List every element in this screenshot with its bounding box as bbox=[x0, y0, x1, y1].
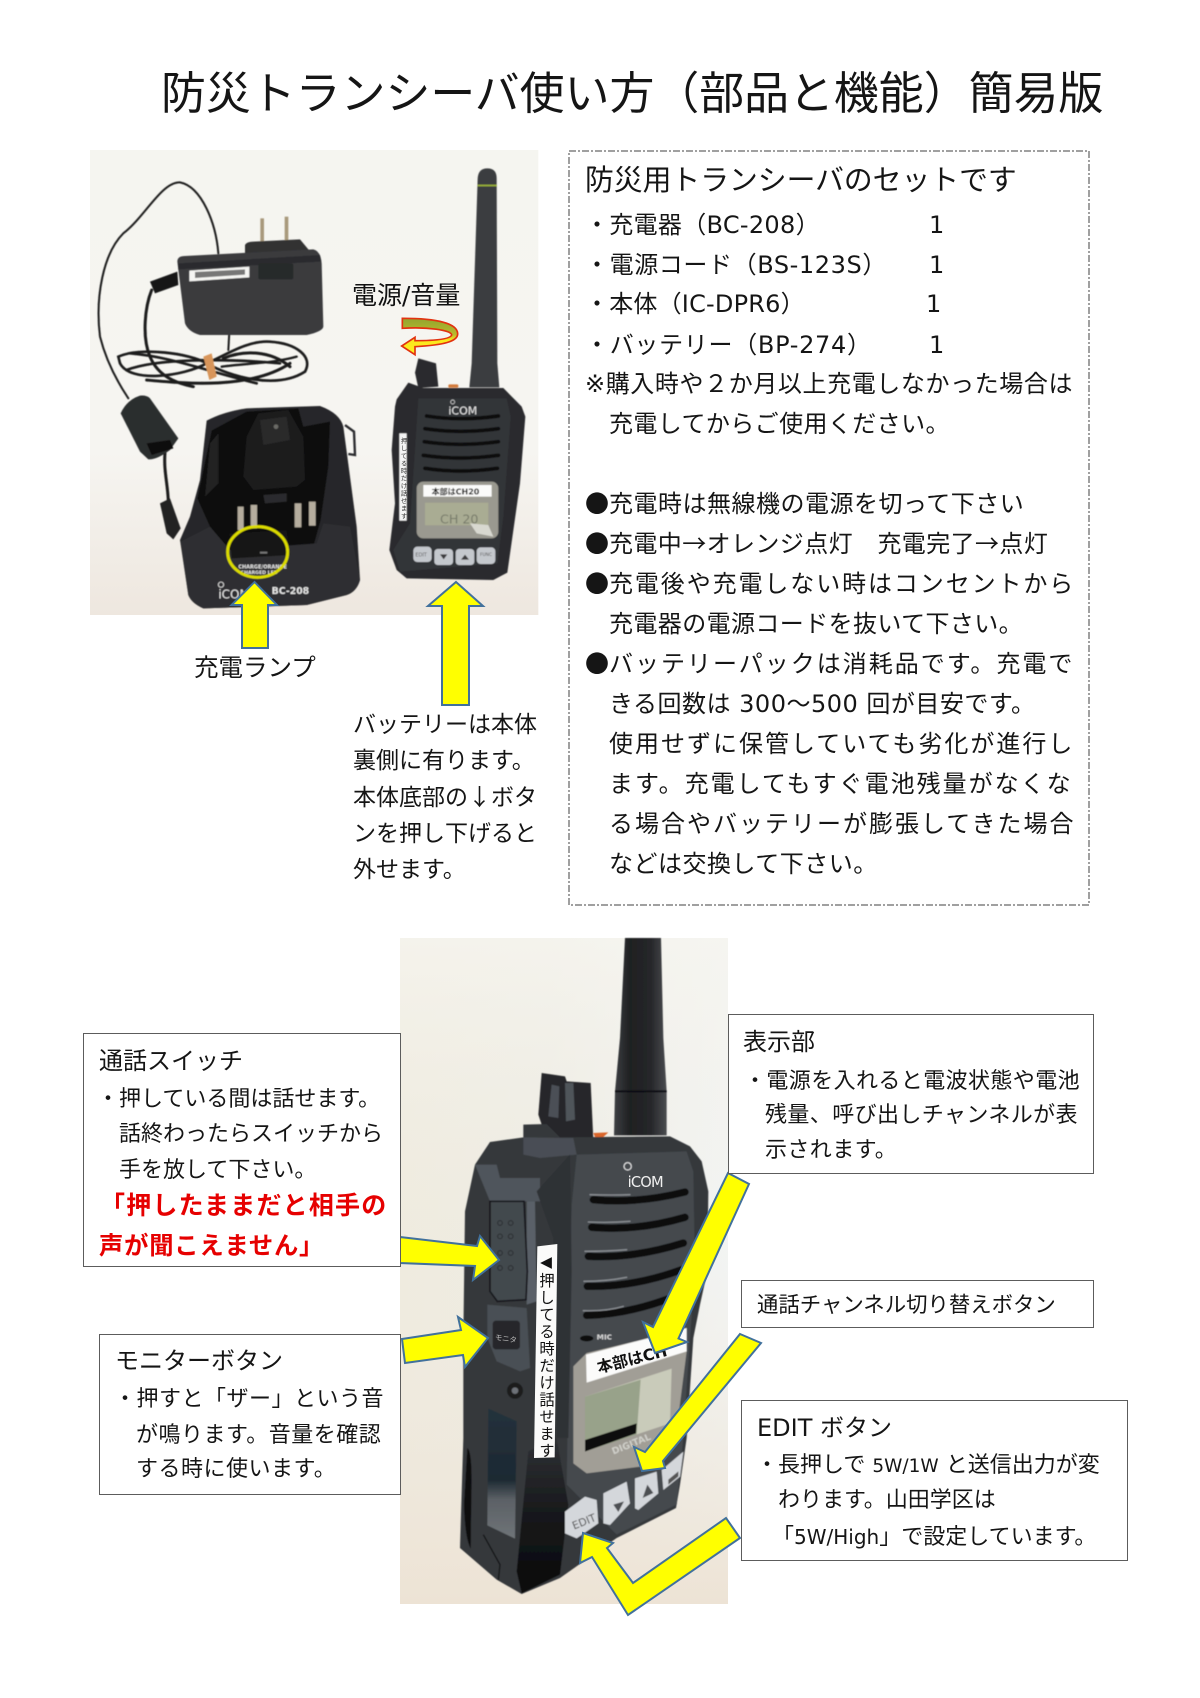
callout: display: 表示部 bbox=[743, 1028, 815, 1056]
list: charging notes: ●充電中→オレンジ点灯 充電完了→点灯 bbox=[585, 524, 1048, 559]
volume knob bbox=[415, 358, 438, 388]
radio body bbox=[460, 1124, 708, 1594]
callout: EDIT button: わります。山田学区は bbox=[778, 1488, 996, 1513]
sticker: press to talk: ◀押してる時だけ話せます bbox=[537, 1253, 555, 1460]
photo: transceiver close-up: iCOM bbox=[628, 1174, 664, 1191]
list: charging notes: きる回数は 300～500 回が目安です。 bbox=[609, 690, 1036, 718]
list: charging notes: ●充電時は無線機の電源を切って下さい bbox=[585, 484, 1024, 519]
callout: monitor button bbox=[99, 1334, 401, 1495]
callout: EDIT button: 「5W/High」で設定しています。 bbox=[772, 1525, 1096, 1550]
note: charge before use bbox=[585, 370, 1073, 438]
side sticker bbox=[399, 433, 407, 521]
monitor button bbox=[493, 1321, 520, 1349]
panel heading: 防災用トランシーバのセットです bbox=[585, 163, 1017, 197]
plug bbox=[160, 498, 181, 539]
channel label bbox=[586, 1328, 687, 1383]
adapter bbox=[245, 239, 312, 257]
list: set contents: ・本体（IC-DPR6） bbox=[585, 290, 805, 318]
callout: monitor button: モニターボタン bbox=[115, 1347, 283, 1375]
charger lettering: iCOM bbox=[218, 587, 250, 601]
antenna bbox=[469, 168, 499, 387]
callout: talk switch: 手を放して下さい。 bbox=[119, 1158, 316, 1183]
charger lettering: BC-208 bbox=[272, 586, 309, 597]
text block: battery location: ンを押し下げると bbox=[353, 821, 537, 847]
text block: battery location: 本体底部の↓ボタ bbox=[353, 778, 537, 812]
display bbox=[417, 482, 498, 538]
front face bbox=[567, 1151, 695, 1535]
callout: channel switch buttons: 通話チャンネル切り替えボタン bbox=[757, 1293, 1056, 1318]
label: charging lamp: 充電ランプ bbox=[194, 653, 316, 682]
lcd bbox=[585, 1369, 672, 1452]
list: set contents: ・充電器（BC-208） bbox=[585, 211, 820, 239]
reflective side panel bbox=[487, 1409, 517, 1539]
panel: set contents and charging notes bbox=[568, 150, 1090, 906]
warning text: 「押したままだと相手の bbox=[100, 1191, 387, 1220]
text block: battery location bbox=[353, 712, 537, 883]
buttons bbox=[413, 547, 495, 565]
charger well bbox=[197, 408, 330, 552]
note: charge before use: ※購入時や２か月以上充電しなかった場合は bbox=[585, 370, 1073, 398]
callout: display: ・電源を入れると電波状態や電池 bbox=[744, 1069, 1080, 1094]
arrow: battery bbox=[428, 582, 483, 705]
callout: EDIT button bbox=[741, 1400, 1128, 1561]
warning text: 声が聞こえません」 bbox=[99, 1231, 324, 1260]
arrow: channel buttons bbox=[634, 1334, 761, 1471]
transceiver body bbox=[389, 383, 525, 580]
adapter prongs bbox=[260, 218, 264, 242]
photo: charger set and transceiver: FUNC bbox=[480, 552, 492, 558]
antenna bbox=[614, 938, 667, 1135]
callout: channel switch buttons bbox=[741, 1280, 1094, 1328]
list: charging notes: などは交換して下さい。 bbox=[609, 850, 878, 878]
title: 防災トランシーバ使い方（部品と機能）簡易版 bbox=[161, 67, 1103, 120]
list: charging notes: 使用せずに保管していても劣化が進行し bbox=[609, 730, 1074, 758]
photo: charger set and transceiver: 本部はCH20 bbox=[432, 486, 480, 496]
photo: charger set and transceiver: 押してる時だけ話せます bbox=[400, 436, 407, 519]
callout: monitor button: する時に使います。 bbox=[136, 1457, 336, 1482]
list: charging notes bbox=[585, 484, 1076, 878]
push-to-talk switch bbox=[490, 1201, 527, 1301]
charger lettering: CHARGE/ORANGE bbox=[238, 564, 288, 570]
text block: battery location: バッテリーは本体 bbox=[353, 712, 537, 738]
arrow: display bbox=[643, 1173, 749, 1353]
label: power and volume: 電源/音量 bbox=[352, 281, 460, 310]
photo: charger set and transceiver: CH 20 bbox=[440, 511, 478, 526]
charger lettering: CHARGED LED bbox=[241, 570, 278, 576]
charging contacts bbox=[238, 502, 316, 530]
arrow: monitor button bbox=[402, 1317, 488, 1367]
callout: talk switch: ・押している間は話せます。 bbox=[97, 1087, 380, 1112]
photo: transceiver close-up bbox=[400, 937, 728, 1604]
speaker slots bbox=[423, 416, 498, 471]
list: charging notes: 充電器の電源コードを抜いて下さい。 bbox=[609, 610, 1023, 638]
list: set contents bbox=[585, 211, 944, 359]
callout: talk switch bbox=[83, 1033, 401, 1267]
list: charging notes: ます。充電してもすぐ電池残量がなくな bbox=[609, 770, 1073, 798]
corner shadow bbox=[517, 1438, 568, 1593]
photo: transceiver close-up: DIGITAL bbox=[610, 1432, 653, 1457]
photo: transceiver close-up: MIC bbox=[597, 1333, 612, 1342]
charger lettering bbox=[218, 564, 309, 601]
volume knob bbox=[538, 1073, 593, 1140]
arrow: talk switch bbox=[400, 1236, 499, 1280]
warning text bbox=[99, 1191, 387, 1260]
charging lamp highlight ring bbox=[228, 527, 288, 577]
callout: monitor button: ・押すと「ザー」という音 bbox=[114, 1387, 384, 1412]
callout: monitor button: が鳴ります。音量を確認 bbox=[136, 1423, 381, 1448]
callout: talk switch: 通話スイッチ bbox=[99, 1047, 243, 1075]
text block: battery location: 裏側に有ります。 bbox=[353, 748, 535, 774]
list: set contents: 1 bbox=[929, 331, 944, 359]
list: charging notes: ●バッテリーパックは消耗品です。充電で bbox=[585, 644, 1074, 679]
photo: charger set and transceiver: EDIT bbox=[415, 553, 428, 559]
photo: charger set and transceiver bbox=[90, 150, 538, 615]
display bezel bbox=[573, 1330, 687, 1473]
photo: transceiver close-up: 本部はCH bbox=[595, 1341, 669, 1377]
note: charge before use: 充電してからご使用ください。 bbox=[609, 410, 950, 438]
list: set contents: 1 bbox=[929, 211, 944, 239]
icon: rotation arrow bbox=[402, 318, 458, 355]
arrow: charging lamp bbox=[232, 582, 277, 648]
speaker slots bbox=[583, 1192, 685, 1315]
buttons bbox=[565, 1452, 683, 1538]
charger cord bbox=[99, 182, 307, 503]
text block: battery location: 外せます。 bbox=[353, 857, 466, 883]
callout: EDIT button: EDIT ボタン bbox=[757, 1414, 892, 1442]
list: charging notes: ●充電後や充電しない時はコンセントから bbox=[585, 564, 1075, 599]
callout: talk switch: 話終わったらスイッチから bbox=[119, 1122, 383, 1147]
callout: EDIT button: ・長押しで 5W/1W と送信出力が変 bbox=[756, 1453, 1100, 1478]
list: set contents: 1 bbox=[926, 290, 941, 318]
callout: display: 示されます。 bbox=[765, 1138, 897, 1163]
list: set contents: ・バッテリー（BP-274） bbox=[585, 331, 872, 359]
photo: transceiver close-up: モニタ bbox=[494, 1333, 517, 1345]
list: charging notes: る場合やバッテリーが膨張してきた場合 bbox=[609, 810, 1076, 838]
callout: display: 残量、呼び出しチャンネルが表 bbox=[765, 1103, 1078, 1128]
jack bbox=[507, 1383, 523, 1399]
callout: display bbox=[728, 1014, 1094, 1174]
charger body bbox=[180, 406, 360, 608]
list: set contents: ・電源コード（BS-123S） bbox=[585, 251, 887, 279]
list: set contents: 1 bbox=[929, 251, 944, 279]
photo: charger set and transceiver: iCOM bbox=[448, 404, 477, 417]
photo: transceiver close-up: EDIT bbox=[570, 1511, 598, 1532]
arrow: EDIT button bbox=[580, 1518, 740, 1615]
ferrite core bbox=[121, 396, 178, 459]
